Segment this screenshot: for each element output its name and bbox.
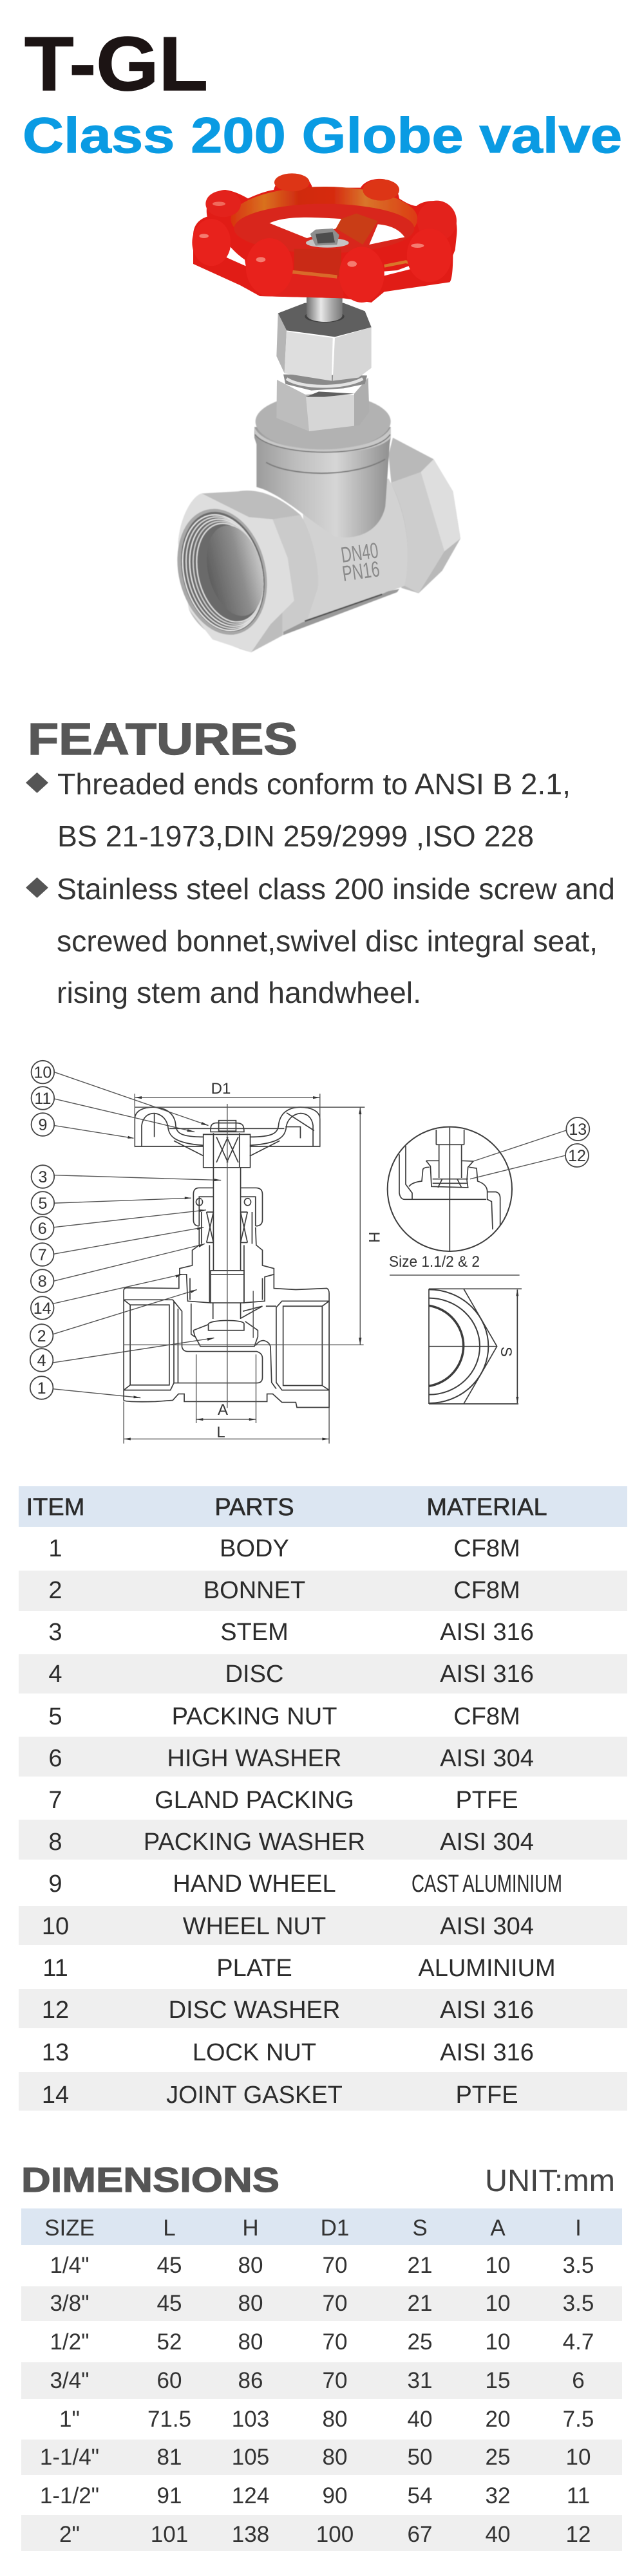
size 1-1/2: 54 [408,2483,432,2508]
parts table header [19,1486,627,1527]
row 5: 5 [48,1703,62,1730]
row 4: DISC [225,1661,283,1688]
dimensions table header: I [575,2216,582,2241]
callout 12 [565,1144,589,1167]
body outer [124,1274,329,1408]
size 1: 40 [408,2407,432,2432]
stem [213,1168,241,1271]
row 2: BONNET [204,1577,305,1604]
separator rule [390,1274,520,1276]
row 13: LOCK NUT [193,2039,316,2066]
size 2: 2" [59,2522,80,2547]
size 1-1/4: 105 [232,2445,269,2470]
callout 4 [30,1349,53,1372]
callout 1 [30,1376,53,1399]
row 2: 2 [48,1577,62,1604]
size 3/8: 3/8" [50,2291,90,2316]
size 3/4: 70 [323,2368,347,2393]
size 1/2: 25 [408,2329,432,2355]
row 6: AISI 304 [440,1745,534,1772]
callout 13 [566,1117,589,1141]
size 3/4: 86 [238,2368,263,2393]
size 2: 67 [408,2522,432,2547]
size 1-1/4: 50 [408,2445,432,2470]
size 1/4: 80 [238,2253,263,2278]
size 2: 101 [151,2522,188,2547]
row 11: ALUMINIUM [418,1955,556,1982]
size 1/2: 10 [486,2329,510,2355]
stem collar and disc [193,1271,262,1347]
body marking DN40: DN40 [339,538,380,568]
size 2: 12 [566,2522,591,2547]
feature 1 line 2: BS 21-1973,DIN 259/2999 ,ISO 228 [57,819,534,853]
row 4: AISI 316 [440,1661,534,1688]
icon: diamond bullet [26,772,48,793]
size 1-1/2 [40,2483,590,2508]
row 3 [48,1619,534,1646]
row 8 [19,1820,627,1860]
title: model T-GL: T-GL [24,21,208,107]
row 9: 9 [48,1871,62,1898]
callout 3 [32,1165,54,1188]
row 13: 13 [42,2039,69,2066]
size 1: 20 [486,2407,510,2432]
dimensions table header: L [163,2216,176,2241]
row 6: 6 [48,1745,62,1772]
size 1-1/2: 124 [232,2483,269,2508]
feature 2 line 1: Stainless steel class 200 inside screw and [57,872,615,906]
dimensions table header [21,2208,622,2245]
callout 7 [31,1243,54,1266]
callout 2 [30,1324,53,1347]
size 1-1/4: 1-1/4" [40,2445,99,2470]
bonnet [180,1227,274,1303]
callout 14 [31,1296,54,1320]
row 12: AISI 316 [440,1997,534,2024]
size 3/4: 6 [572,2368,585,2393]
section linework [52,1072,365,1444]
row 5: CF8M [453,1703,520,1730]
detail linework [388,1127,566,1404]
row 9 [48,1871,562,1898]
row 2: CF8M [453,1577,520,1604]
size 2: 100 [316,2522,354,2547]
dimensions table [21,2208,622,2551]
size 1/4: 70 [323,2253,347,2278]
valve body [165,394,460,652]
icon: diamond bullet [26,877,48,898]
parts table header: PARTS [214,1494,294,1521]
row 3: STEM [220,1619,289,1646]
row 9: CAST ALUMINIUM [412,1871,562,1898]
row 1 [48,1535,520,1562]
leaders [52,1072,221,1398]
row 5 [48,1703,520,1730]
feature 2 line 3: rising stem and handwheel. [57,976,421,1009]
row 7: 7 [48,1787,62,1814]
size 1: 103 [232,2407,269,2432]
size 3/8: 21 [408,2291,432,2316]
size 1/4: 45 [157,2253,182,2278]
row 4: 4 [48,1661,62,1688]
size 1/4: 10 [486,2253,510,2278]
dimension label D1: D1 [211,1080,231,1097]
callout 10 [32,1061,54,1083]
parts table header: ITEM [26,1494,84,1521]
size 3/8: 80 [238,2291,263,2316]
size 1-1/2: 90 [323,2483,347,2508]
row 1: 1 [48,1535,62,1562]
callout 5 [32,1191,54,1215]
row 1: CF8M [453,1535,520,1562]
red handwheel [192,173,457,303]
row 2 [19,1571,627,1611]
size 1/2 [50,2329,594,2355]
row 11: 11 [43,1955,68,1982]
hex end view [429,1289,522,1404]
size 1-1/4: 25 [486,2445,510,2470]
dimension label S: S [497,1347,515,1357]
dimensions table header: H [242,2216,259,2241]
callout 7: 7 [38,1246,47,1264]
stem and hex nuts [276,296,372,431]
size 1 [59,2407,594,2432]
parts table [19,1486,627,2111]
row 11 [43,1955,556,1982]
dimension label L: L [216,1424,225,1441]
callout 1: 1 [37,1379,46,1397]
row 14: JOINT GASKET [166,2082,343,2109]
size 1: 71.5 [147,2407,191,2432]
feature 2 line 2: screwed bonnet,swivel disc integral seat, [57,924,598,958]
size 3/4: 3/4" [50,2368,90,2393]
row 13 [42,2039,534,2066]
packing nut [193,1188,262,1226]
left and right bores [124,1300,262,1390]
heading: FEATURES: FEATURES [28,714,298,764]
row 10 [19,1906,627,1945]
row 10: 10 [42,1913,69,1940]
feature 1 line 1: Threaded ends conform to ANSI B 2.1, [57,767,571,801]
row 14: 14 [42,2082,69,2109]
size 3/8: 45 [157,2291,182,2316]
dimension label H: H [365,1231,383,1243]
callout 10: 10 [33,1063,52,1081]
size 3/4: 15 [486,2368,510,2393]
size 1/2: 80 [238,2329,263,2355]
dimensions table header: A [490,2216,506,2241]
size 3/4 [21,2362,622,2399]
row 11: PLATE [216,1955,292,1982]
size 2: 40 [486,2522,510,2547]
callout 11 [32,1087,54,1110]
size 1-1/2: 1-1/2" [40,2483,99,2508]
size 3/8: 70 [323,2291,347,2316]
detail caption: Size 1.1/2 & 2 [389,1253,480,1271]
unit note: UNIT:mm [485,2164,615,2198]
product photo: globe valve [165,173,460,652]
size 1-1/2: 32 [486,2483,510,2508]
size 1/2: 52 [157,2329,182,2355]
row 8: PACKING WASHER [144,1829,365,1856]
dimension label A: A [218,1401,228,1419]
size 1: 1" [59,2407,80,2432]
size 2: 138 [232,2522,269,2547]
size 3/4: 60 [157,2368,182,2393]
body marking PN16: PN16 [341,557,381,586]
callout 6 [31,1217,54,1240]
row 6: HIGH WASHER [167,1745,341,1772]
callout 14: 14 [33,1300,52,1318]
size 1-1/2: 11 [567,2483,590,2508]
row 14 [19,2072,627,2111]
row 14: PTFE [455,2082,518,2109]
callout 11: 11 [34,1090,51,1108]
row 12: 12 [42,1997,69,2024]
dimensions table header: D1 [321,2216,349,2241]
size 1/4: 21 [408,2253,432,2278]
size 1-1/4: 81 [157,2445,182,2470]
size 3/8 [21,2286,622,2321]
row 12 [19,1989,627,2028]
size 1/4: 1/4" [50,2253,90,2278]
dimension lines [123,1094,365,1444]
row 7 [48,1787,518,1814]
callout 6: 6 [38,1220,47,1238]
row 8: AISI 304 [440,1829,534,1856]
callout 3: 3 [38,1168,47,1186]
detail drawing: size 1.1/2 and 2 stem seat [388,1117,589,1404]
parts table header: MATERIAL [426,1494,547,1521]
size 1-1/2: 91 [157,2483,182,2508]
size 3/8: 3.5 [563,2291,594,2316]
callout 9 [32,1113,54,1136]
dimensions table header: SIZE [44,2216,95,2241]
size 1/2: 70 [323,2329,347,2355]
row 6 [19,1737,627,1777]
size 1/4: 3.5 [563,2253,594,2278]
row 7: GLAND PACKING [155,1787,354,1814]
callout 8: 8 [38,1273,47,1291]
size 1-1/4 [21,2440,622,2475]
size 1: 7.5 [563,2407,594,2432]
row 9: HAND WHEEL [173,1871,336,1898]
row 10: AISI 304 [440,1913,534,1940]
size 1/4 [50,2253,594,2278]
row 3: AISI 316 [440,1619,534,1646]
technical drawing: valve cross section [30,1061,383,1444]
features list [26,767,615,1009]
row 13: AISI 316 [440,2039,534,2066]
size 1: 80 [323,2407,347,2432]
row 3: 3 [48,1619,62,1646]
callout 4: 4 [37,1352,46,1370]
callout 5: 5 [38,1195,47,1213]
size 1/2: 1/2" [50,2329,90,2355]
size 2 [21,2515,622,2551]
dimensions table header: S [412,2216,428,2241]
heading: DIMENSIONS: DIMENSIONS [21,2161,279,2199]
size 3/8: 10 [486,2291,510,2316]
row 8: 8 [48,1829,62,1856]
dimension arrowheads [124,1096,361,1441]
callout 12: 12 [568,1147,586,1165]
row 4 [19,1654,627,1694]
size 1/2: 4.7 [563,2329,594,2355]
callout 13: 13 [569,1121,587,1139]
row 1: BODY [220,1535,289,1562]
callout 8 [31,1269,54,1293]
row 12: DISC WASHER [169,1997,340,2024]
size 1-1/4: 80 [323,2445,347,2470]
row 5: PACKING NUT [172,1703,337,1730]
row 7: PTFE [455,1787,518,1814]
callout 9: 9 [38,1116,47,1134]
handwheel [135,1107,320,1156]
row 10: WHEEL NUT [183,1913,326,1940]
size 3/4: 31 [408,2368,432,2393]
size 1-1/4: 10 [566,2445,591,2470]
subtitle: Class 200 Globe valve: Class 200 Globe valve [23,107,622,163]
callout 2: 2 [37,1327,46,1345]
